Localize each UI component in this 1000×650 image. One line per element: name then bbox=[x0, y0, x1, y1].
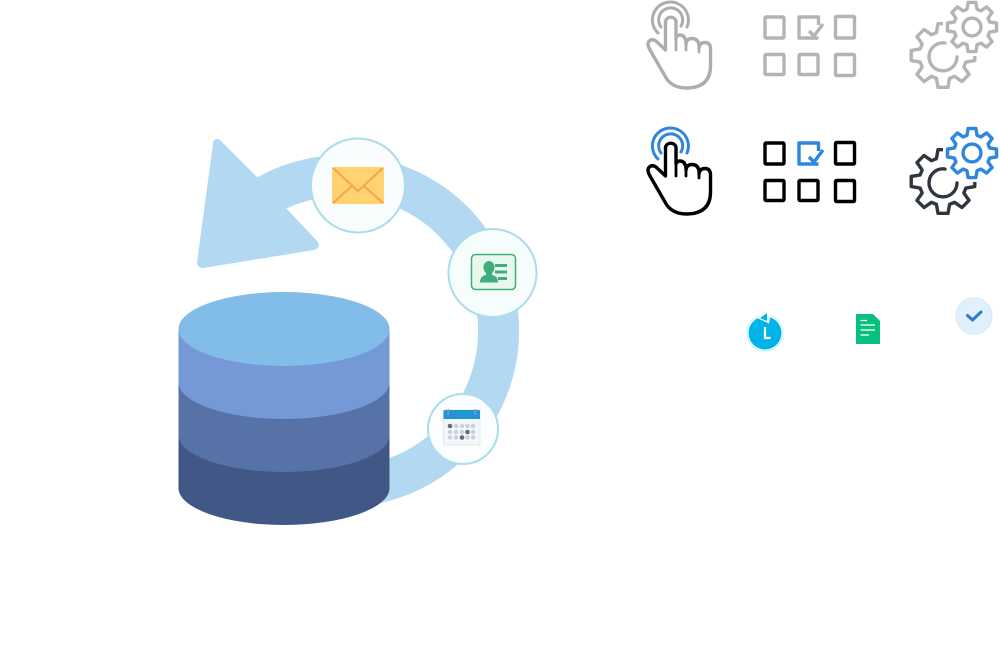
icon: check mark badge bbox=[956, 298, 992, 334]
icon: blue clock with arrow bbox=[747, 312, 783, 351]
icon: contact card in circle bbox=[448, 229, 536, 317]
arrow: circular cycle arrow bbox=[197, 139, 499, 487]
icon: green document bbox=[856, 314, 880, 344]
chart: stacked database cylinder bbox=[178, 292, 390, 525]
icon: grey gears bbox=[911, 2, 997, 87]
icon: calendar in circle bbox=[428, 394, 498, 464]
icon: coloured checklist grid bbox=[765, 142, 854, 202]
panel: database cycle illustration bbox=[178, 138, 536, 525]
icon: grey checklist grid bbox=[765, 16, 854, 76]
icon: grey tap gesture hand bbox=[648, 2, 710, 88]
icon: envelope in circle bbox=[311, 138, 405, 232]
icon: coloured gears bbox=[911, 128, 997, 213]
icon: coloured tap gesture hand bbox=[648, 128, 710, 214]
